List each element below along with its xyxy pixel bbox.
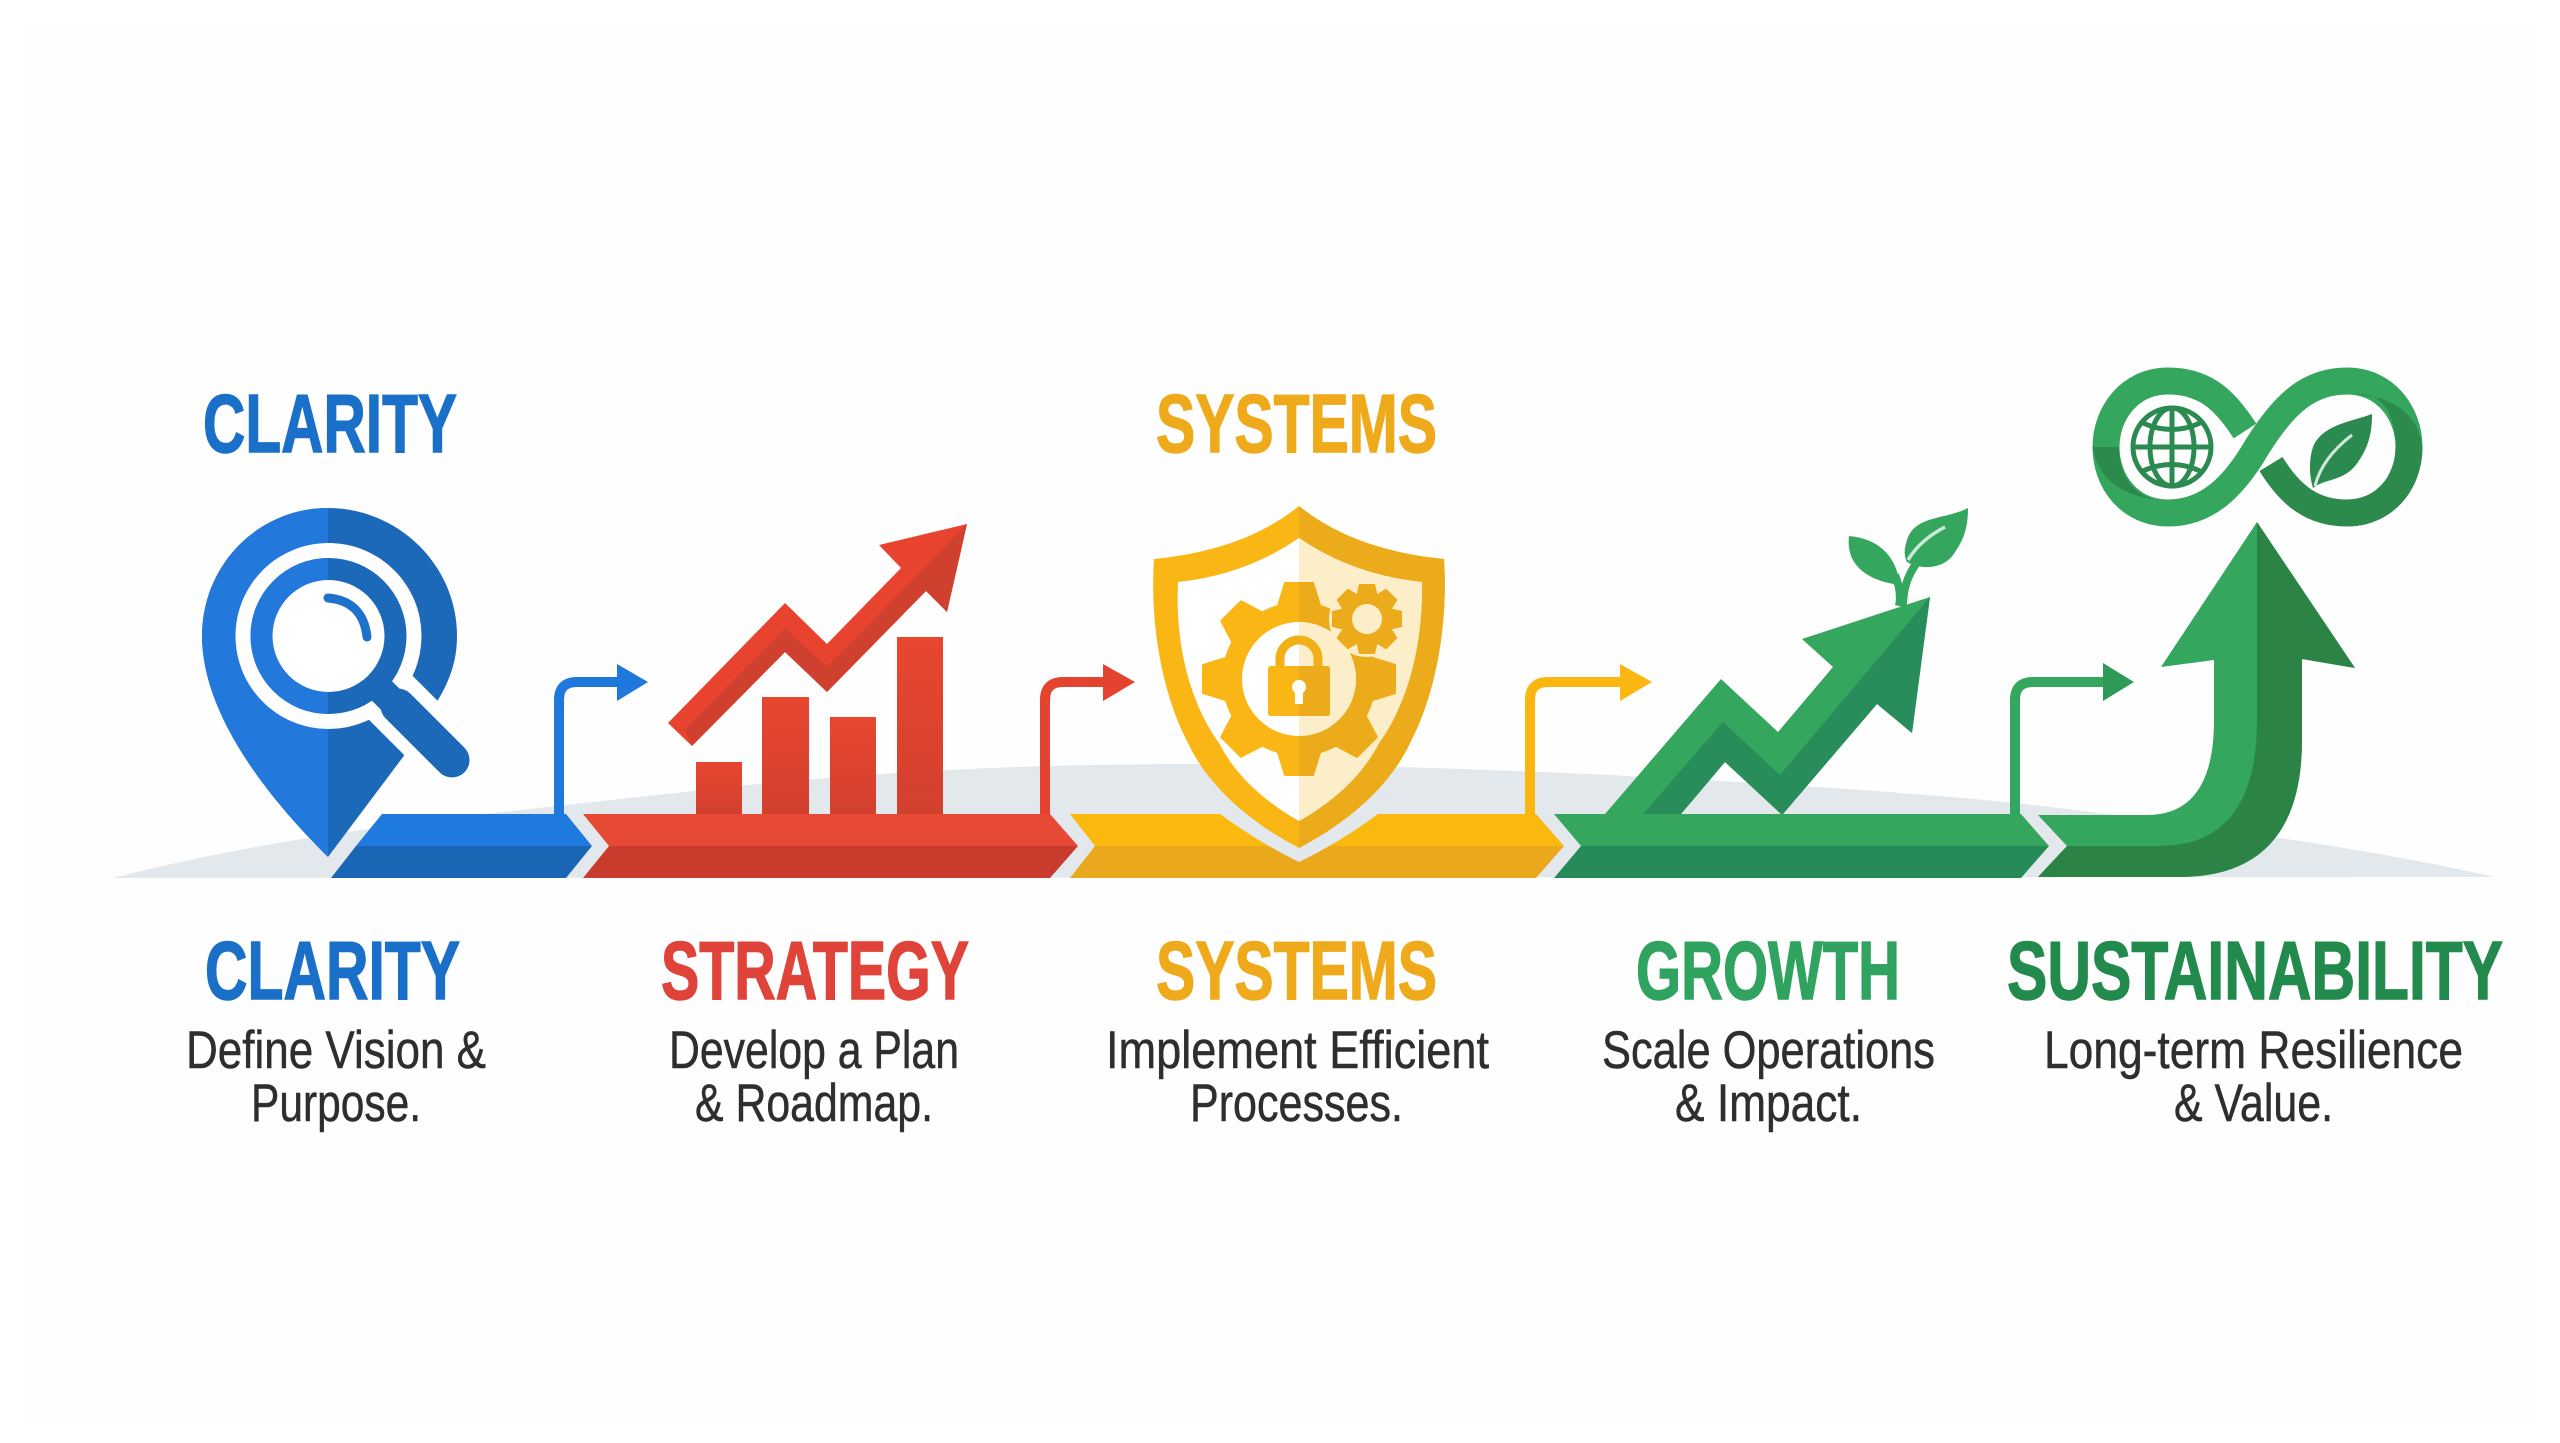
label: growth: & Impact. — [1675, 1074, 1862, 1133]
step 2: strategy — [583, 524, 1135, 1133]
step 1: clarity — [186, 377, 648, 1133]
icon: sprout — [1849, 508, 1968, 606]
label: clarity: Define Vision & — [186, 1021, 486, 1080]
label: sustainability: Long-term Resilience — [2044, 1021, 2463, 1080]
icon: shield with gears and lock — [1153, 506, 1445, 848]
small gear — [1329, 581, 1405, 657]
label: systems: SYSTEMS — [1156, 924, 1437, 1017]
label: strategy: Develop a Plan — [669, 1021, 959, 1080]
bar chart — [696, 637, 943, 814]
heading: systems top: SYSTEMS — [1156, 377, 1437, 470]
label: systems: Implement Efficient — [1106, 1021, 1489, 1080]
arrow: strategy to systems — [1045, 664, 1135, 814]
padlock — [1268, 640, 1330, 716]
base chevron: blue — [331, 814, 592, 878]
label: systems — [1106, 924, 1489, 1133]
step 5: sustainability — [2007, 381, 2503, 1133]
icon: curved up arrow — [2038, 522, 2355, 877]
arrow: clarity to strategy — [559, 664, 648, 814]
label: systems: Processes. — [1190, 1074, 1403, 1133]
grey horizon mound — [113, 764, 2494, 878]
icon: location pin with magnifier — [202, 508, 470, 857]
label: clarity: CLARITY — [205, 924, 460, 1017]
label: growth — [1602, 924, 1935, 1133]
arrow: systems to growth — [1530, 664, 1652, 814]
label: strategy: STRATEGY — [661, 924, 969, 1017]
label: growth: GROWTH — [1636, 924, 1900, 1017]
icon: rising red arrow — [668, 524, 967, 746]
icon: zigzag growth arrow — [1605, 597, 1930, 814]
icon: infinity loop with globe and leaf — [2093, 381, 2422, 513]
leaf — [2310, 414, 2372, 488]
arrow: growth to sustainability — [2015, 663, 2134, 814]
big gear — [1203, 583, 1395, 775]
label: sustainability: & Value. — [2174, 1074, 2333, 1133]
label: clarity — [186, 924, 486, 1133]
step 4: growth — [1554, 508, 2134, 1133]
label: strategy: & Roadmap. — [695, 1074, 933, 1133]
label: sustainability — [2007, 924, 2503, 1133]
heading: clarity top: CLARITY — [203, 377, 457, 470]
globe — [2133, 408, 2211, 486]
label: clarity: Purpose. — [251, 1074, 421, 1133]
base chevron: green — [1554, 814, 2049, 878]
step 3: systems — [1070, 377, 1652, 1133]
base chevron: yellow — [1070, 814, 1564, 878]
label: strategy — [661, 924, 969, 1133]
base chevron: red — [583, 814, 1078, 878]
label: growth: Scale Operations — [1602, 1021, 1935, 1080]
